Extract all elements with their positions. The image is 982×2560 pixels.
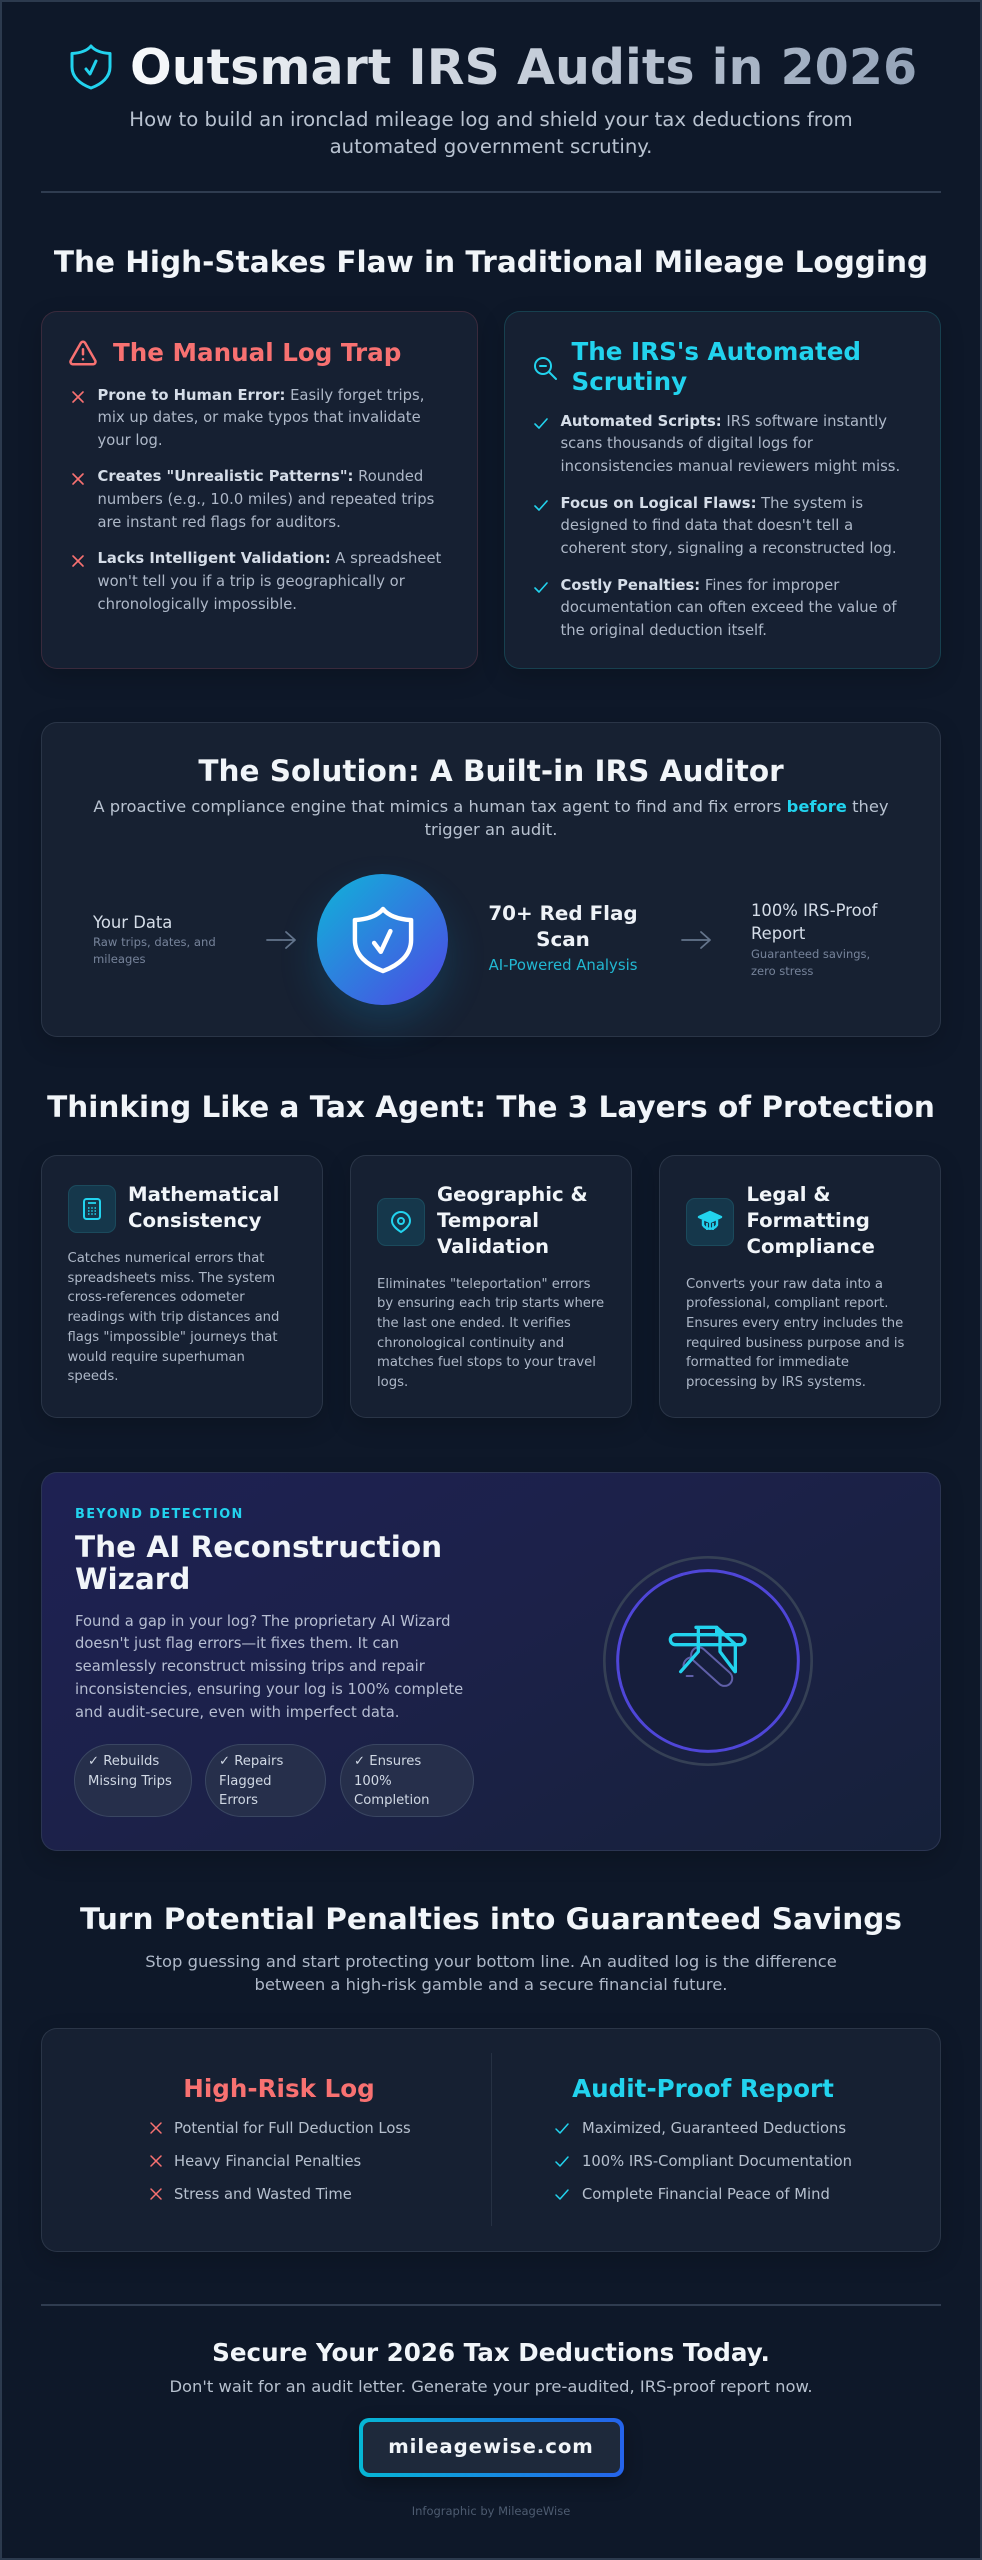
card title: Formatting (746, 1209, 870, 1232)
card text: Ensures every entry includes the (686, 1316, 903, 1331)
item: Potential for Full Deduction Loss (174, 2120, 411, 2137)
card text: chronological continuity and (377, 1336, 564, 1351)
panel: geographic and temporal validation (350, 1155, 632, 1418)
card text (68, 1251, 279, 1384)
card title (437, 1183, 588, 1258)
wizard description: and audit-secure, even with imperfect data. (75, 1704, 399, 1721)
card title: Legal & (746, 1183, 831, 1206)
list item: unrealistic patterns: Creates "Unrealistic Patterns": Rounded (98, 468, 423, 485)
icon: scan shield badge (316, 874, 448, 1004)
list item: costly penalties: Costly Penalties: Fines for improper (560, 577, 839, 594)
card text (377, 1276, 604, 1390)
icon: graduation cap (686, 1198, 734, 1246)
icon: check (555, 2189, 569, 2200)
pill: rebuilds missing trips (74, 1744, 192, 1817)
list item: validation: Lacks Intelligent Validation: A spreadsheet (98, 550, 441, 567)
arrow (681, 931, 711, 949)
step title: Report (751, 924, 805, 943)
list item: validation (98, 550, 441, 613)
title: Outsmart IRS Audits in 2026 (130, 38, 917, 96)
footer credit: Infographic by MileageWise (412, 2504, 570, 2518)
wizard description: Found a gap in your log? The proprietary AI Wizard (75, 1612, 450, 1630)
item: Heavy Financial Penalties (174, 2153, 361, 2170)
card text: would require superhuman (68, 1350, 245, 1365)
panel: the solution (41, 722, 941, 1037)
list item: costly penalties: documentation can often exceed the value of (560, 599, 897, 616)
text: savings description: between a high-risk gamble and a secure financial future. (254, 1974, 728, 1994)
step title (488, 902, 638, 951)
heading: manual log trap: The Manual Log Trap (113, 338, 401, 367)
card text: flags "impossible" journeys that (68, 1330, 278, 1345)
button label (362, 2422, 620, 2473)
icon: check (534, 418, 548, 429)
heading: turn penalties into savings: Turn Potential Penalties into Guaranteed Savings (80, 1902, 902, 1936)
text: savings description: Stop guessing and start protecting your bottom line. An audited log is the difference (145, 1952, 837, 1970)
card title: Validation (437, 1235, 549, 1258)
panel: comparison (41, 2028, 941, 2252)
pill: ensures completion: 100% (354, 1774, 392, 1789)
pill: ensures completion: ✓ Ensures (354, 1754, 421, 1769)
card text: cross-references odometer (68, 1290, 245, 1305)
list item: unrealistic patterns: are instant red flags for auditors. (98, 514, 341, 531)
card text: professional, compliant report. (686, 1296, 888, 1311)
icon: check (555, 2156, 569, 2167)
list item: automated scripts: inconsistencies manual reviewers might miss. (560, 458, 900, 475)
card text: by ensuring each trip starts where (377, 1296, 604, 1311)
list item: automated scripts (560, 413, 900, 475)
arrow (266, 931, 296, 949)
card title: Compliance (746, 1235, 875, 1258)
heading: high-risk log: High-Risk Log (183, 2074, 375, 2103)
card title (746, 1183, 875, 1258)
pill: rebuilds missing trips: ✓ Rebuilds (88, 1754, 159, 1769)
card text: the last one ended. It verifies (377, 1316, 571, 1331)
step title: 70+ Red Flag (488, 902, 638, 925)
step title (751, 901, 878, 943)
card title: Consistency (128, 1209, 261, 1232)
pill: repairs flagged errors: Errors (219, 1793, 258, 1808)
list item: logical flaws: coherent story, signaling a reconstructed log. (560, 540, 897, 557)
step caption: Raw trips, dates, and (93, 935, 216, 949)
heading: audit-proof report: Audit-Proof Report (572, 2074, 834, 2103)
card text: processing by IRS systems. (686, 1375, 866, 1390)
list item: validation: chronologically impossible. (98, 596, 297, 613)
heading: solution: The Solution: A Built-in IRS Auditor (198, 754, 784, 788)
icon: x mark (72, 473, 84, 485)
heading: wizard (75, 1530, 442, 1596)
pill: repairs flagged errors (205, 1744, 326, 1817)
icon: x mark (72, 391, 84, 403)
step caption (751, 947, 870, 978)
heading: three layers: Thinking Like a Tax Agent: The 3 Layers of Protection (47, 1090, 935, 1124)
eyebrow label: BEYOND DETECTION (75, 1507, 244, 1522)
call to action heading: Secure Your 2026 Tax Deductions Today. (212, 2338, 770, 2367)
icon: x mark (150, 2155, 162, 2167)
pill: repairs flagged errors: ✓ Repairs (219, 1754, 283, 1769)
subtitle: automated government scrutiny. (330, 135, 652, 158)
icon: wizard rings and magic wand (603, 1556, 813, 1766)
heading: wizard: The AI Reconstruction (75, 1530, 442, 1564)
icon: x mark (150, 2188, 162, 2200)
list item: costly penalties (560, 577, 897, 639)
card title: Temporal (437, 1209, 539, 1232)
list item: human error: mix up dates, or make typos that invalidate (98, 409, 421, 426)
panel: the manual log trap (41, 311, 478, 669)
text: solution description: A proactive compliance engine that mimics a human tax agent to find and fix errors before they (93, 796, 889, 816)
heading: automated scrutiny: The IRS's Automated (572, 337, 861, 366)
step caption: Guaranteed savings, (751, 947, 870, 961)
icon: x mark (72, 555, 84, 567)
header: title and subtitle (70, 38, 917, 158)
icon: calculator (68, 1185, 116, 1233)
step title: Scan (536, 928, 590, 951)
item: Stress and Wasted Time (174, 2186, 352, 2203)
list item: human error (98, 387, 424, 449)
wizard description: inconsistencies, ensuring your log is 100% complete (75, 1681, 463, 1698)
icon: x mark (150, 2122, 162, 2134)
step title: 100% IRS-Proof (751, 901, 877, 920)
card text: Eliminates "teleportation" errors (377, 1276, 591, 1292)
list item: human error: your log. (98, 432, 163, 449)
card text: speeds. (68, 1369, 118, 1384)
pill: repairs flagged errors: Flagged (219, 1774, 272, 1789)
card title (128, 1183, 279, 1232)
item: 100% IRS-Compliant Documentation (582, 2153, 852, 2170)
panel: mathematical consistency (41, 1155, 323, 1418)
text: solution description (93, 796, 889, 838)
icon: warning triangle (69, 340, 97, 366)
step caption: AI-Powered Analysis (489, 956, 637, 974)
card title: Geographic & (437, 1183, 588, 1206)
list item: automated scripts: Automated Scripts: IRS software instantly (560, 413, 887, 430)
list item: logical flaws: Focus on Logical Flaws: The system is (560, 495, 863, 512)
call to action text: Don't wait for an audit letter. Generate your pre-audited, IRS-proof report now. (169, 2377, 813, 2396)
list item: automated scripts: scans thousands of digital logs for (560, 435, 813, 452)
list item: human error: Prone to Human Error: Easily forget trips, (98, 387, 424, 404)
list item: validation: won't tell you if a trip is geographically or (98, 573, 405, 590)
icon: magnifier (534, 357, 557, 380)
list item: unrealistic patterns (98, 468, 434, 531)
subtitle (129, 108, 853, 158)
heading: wizard: Wizard (75, 1562, 190, 1596)
wizard description: seamlessly reconstruct missing trips and repair (75, 1658, 425, 1675)
card text (686, 1276, 904, 1390)
button label: mileagewise.com (388, 2435, 594, 2458)
icon: check (555, 2123, 569, 2134)
card text: logs. (377, 1375, 408, 1390)
card text: spreadsheets miss. The system (68, 1271, 275, 1286)
subtitle: How to build an ironclad mileage log and shield your tax deductions from (129, 108, 853, 131)
panel: legal and formatting compliance (659, 1155, 941, 1418)
card text: Catches numerical errors that (68, 1251, 264, 1266)
step caption: mileages (93, 952, 146, 966)
panel: the IRS automated scrutiny (504, 311, 941, 669)
step caption: zero stress (751, 964, 813, 978)
pill: ensures completion (340, 1744, 474, 1817)
wizard description (75, 1612, 463, 1721)
text: solution description: trigger an audit. (425, 820, 557, 838)
list item: costly penalties: the original deduction itself. (560, 622, 767, 639)
list item: unrealistic patterns: numbers (e.g., 10.0 miles) and repeated trips (98, 491, 434, 508)
card text: required business purpose and is (686, 1336, 904, 1351)
heading: high-stakes flaw: The High-Stakes Flaw in Traditional Mileage Logging (54, 245, 928, 279)
card text: matches fuel stops to your travel (377, 1355, 596, 1370)
icon: map pin (377, 1198, 425, 1246)
card text: Converts your raw data into a (686, 1276, 883, 1292)
heading: automated scrutiny (572, 337, 861, 396)
wizard description: doesn't just flag errors—it fixes them. It can (75, 1635, 399, 1652)
text: savings description (145, 1952, 837, 1994)
card title: Mathematical (128, 1183, 279, 1206)
icon: check (534, 500, 548, 511)
step: red flag scan (488, 902, 638, 974)
item: Maximized, Guaranteed Deductions (582, 2120, 846, 2137)
list item: logical flaws (560, 495, 897, 557)
item: Complete Financial Peace of Mind (582, 2186, 830, 2203)
step: your data (93, 913, 216, 966)
icon: shield check (70, 44, 112, 90)
card text: readings with trip distances and (68, 1310, 279, 1325)
card text: formatted for immediate (686, 1355, 849, 1370)
heading: automated scrutiny: Scrutiny (572, 367, 687, 396)
step: IRS-proof report (751, 901, 878, 978)
panel: AI reconstruction wizard (41, 1472, 941, 1851)
icon: check (534, 582, 548, 593)
button: mileagewise.com (358, 2418, 624, 2477)
list item: logical flaws: designed to find data that doesn't tell a (560, 517, 853, 534)
step caption (93, 935, 216, 966)
pill: rebuilds missing trips: Missing Trips (88, 1774, 172, 1789)
icon: white shield check (352, 906, 414, 974)
pill: ensures completion: Completion (354, 1793, 430, 1808)
step title: Your Data (93, 913, 172, 932)
